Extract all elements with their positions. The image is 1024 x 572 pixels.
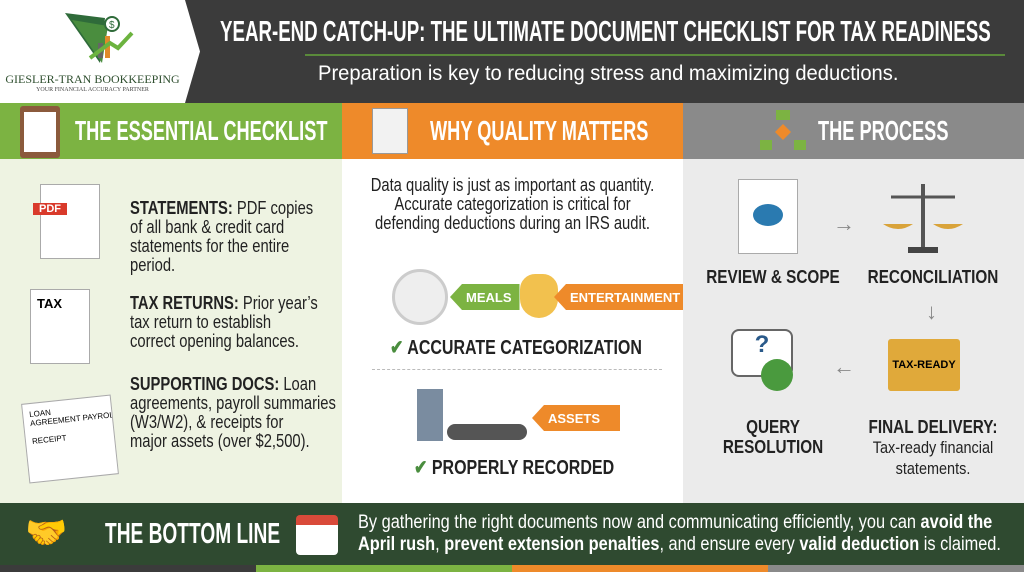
text: quality intro: Data quality is just as important as quantity. <box>371 175 654 195</box>
column header: process <box>683 103 1024 159</box>
arrow left: ← <box>833 354 855 379</box>
bottom band <box>0 503 1024 565</box>
stripes <box>0 565 1024 572</box>
label: final delivery: statements. <box>896 459 970 478</box>
tag: assets: ASSETS <box>548 410 600 426</box>
column header: process: THE PROCESS <box>818 115 948 146</box>
bottom text <box>358 512 1001 555</box>
icon: pdf: PDF <box>39 203 61 215</box>
tag: assets <box>532 405 620 431</box>
icon: assets <box>417 389 527 441</box>
panel: quality <box>372 178 683 474</box>
check: accurate: ✔ ACCURATE CATEGORIZATION <box>390 337 642 359</box>
icon: docs: LOAN <box>29 408 51 419</box>
text: supporting docs: SUPPORTING DOCS: Loan <box>130 374 316 394</box>
icon: tax: TAX <box>37 296 62 311</box>
icon: magnifier doc <box>372 108 408 154</box>
text: statements: of all bank & credit card <box>130 217 284 237</box>
icon: calendar <box>296 515 338 555</box>
text: quality intro: defending deductions during an IRS audit. <box>375 213 650 233</box>
text: statements: period. <box>130 255 175 275</box>
icon: tax <box>30 289 90 364</box>
text: statements: STATEMENTS: PDF copies <box>130 198 313 218</box>
icon: logo: $ <box>109 20 115 31</box>
tag: meals: MEALS <box>466 290 512 304</box>
icon: mask <box>520 274 558 318</box>
column header: quality <box>342 103 683 159</box>
label: query: RESOLUTION <box>723 437 823 457</box>
text: quality intro: Accurate categorization is critical for <box>394 194 631 214</box>
check: properly recorded: ✔ PROPERLY RECORDED <box>414 457 614 479</box>
panel: checklist <box>0 159 342 503</box>
icon: flowchart <box>760 110 806 150</box>
logo text: YOUR FINANCIAL ACCURACY PARTNER <box>36 87 149 93</box>
icon: clipboard <box>20 106 60 158</box>
logo text: GIESLER-TRAN BOOKKEEPING <box>5 72 180 86</box>
text: supporting docs: major assets (over $2,500). <box>130 431 310 451</box>
label: final delivery: FINAL DELIVERY: <box>869 417 997 437</box>
arrow: → <box>833 211 855 236</box>
text: statements <box>130 198 313 275</box>
icon: scales <box>883 184 963 253</box>
text: supporting docs: (W3/W2), & receipts for <box>130 412 283 432</box>
text: tax returns: TAX RETURNS: Prior year’s <box>130 293 318 313</box>
text: statements: statements for the entire <box>130 236 289 256</box>
label: reconciliation: RECONCILIATION <box>868 267 998 287</box>
label: final delivery: Tax-ready financial <box>873 438 993 457</box>
subtitle: Preparation is key to reducing stress and maximizing deductions. <box>318 62 898 85</box>
icon: eye doc <box>738 179 798 254</box>
logo text <box>6 76 180 91</box>
icon: chat <box>731 329 793 377</box>
icon: docs: AGREEMENT PAYROLL <box>30 410 119 428</box>
icon: chat: ? <box>755 331 769 358</box>
icon: pdf <box>40 184 100 259</box>
text: tax returns: correct opening balances. <box>130 331 299 351</box>
bottom text: By gathering the right documents now and communicating efficiently, you can avoid the <box>358 512 992 533</box>
icon: docs: RECEIPT <box>32 433 67 446</box>
icon: folder <box>888 339 960 391</box>
text: tax returns <box>130 293 318 351</box>
label: query: QUERY <box>746 417 800 437</box>
text: supporting docs <box>130 374 336 451</box>
bottom text: April rush, prevent extension penalties, and ensure every valid deduction is claimed. <box>358 534 1001 555</box>
title: YEAR-END CATCH-UP: THE ULTIMATE DOCUMENT CHECKLIST FOR TAX READINESS <box>220 16 991 48</box>
icon: docs <box>21 395 119 483</box>
tag: entertainment: ENTERTAINMENT <box>570 290 680 304</box>
icon: logo <box>65 13 134 63</box>
text: tax returns: tax return to establish <box>130 312 271 332</box>
tag: entertainment <box>554 284 688 310</box>
column header: checklist <box>0 103 342 159</box>
logo area <box>0 0 200 103</box>
tag: meals <box>450 284 520 310</box>
text: quality intro <box>371 175 654 233</box>
label: review: REVIEW & SCOPE <box>706 267 840 287</box>
label: final delivery <box>869 417 997 478</box>
column header: checklist: THE ESSENTIAL CHECKLIST <box>75 115 327 146</box>
bottom title: THE BOTTOM LINE <box>105 518 280 550</box>
label: query <box>723 417 823 457</box>
column header: quality: WHY QUALITY MATTERS <box>430 115 648 146</box>
panel: process <box>683 159 1024 503</box>
icon: plate <box>392 269 448 325</box>
text: supporting docs: agreements, payroll summaries <box>130 393 336 413</box>
header bar <box>0 0 1024 103</box>
icon: folder: TAX-READY <box>892 359 956 371</box>
icon: handshake: 🤝 <box>25 514 67 552</box>
arrow down: ↓ <box>926 299 937 324</box>
